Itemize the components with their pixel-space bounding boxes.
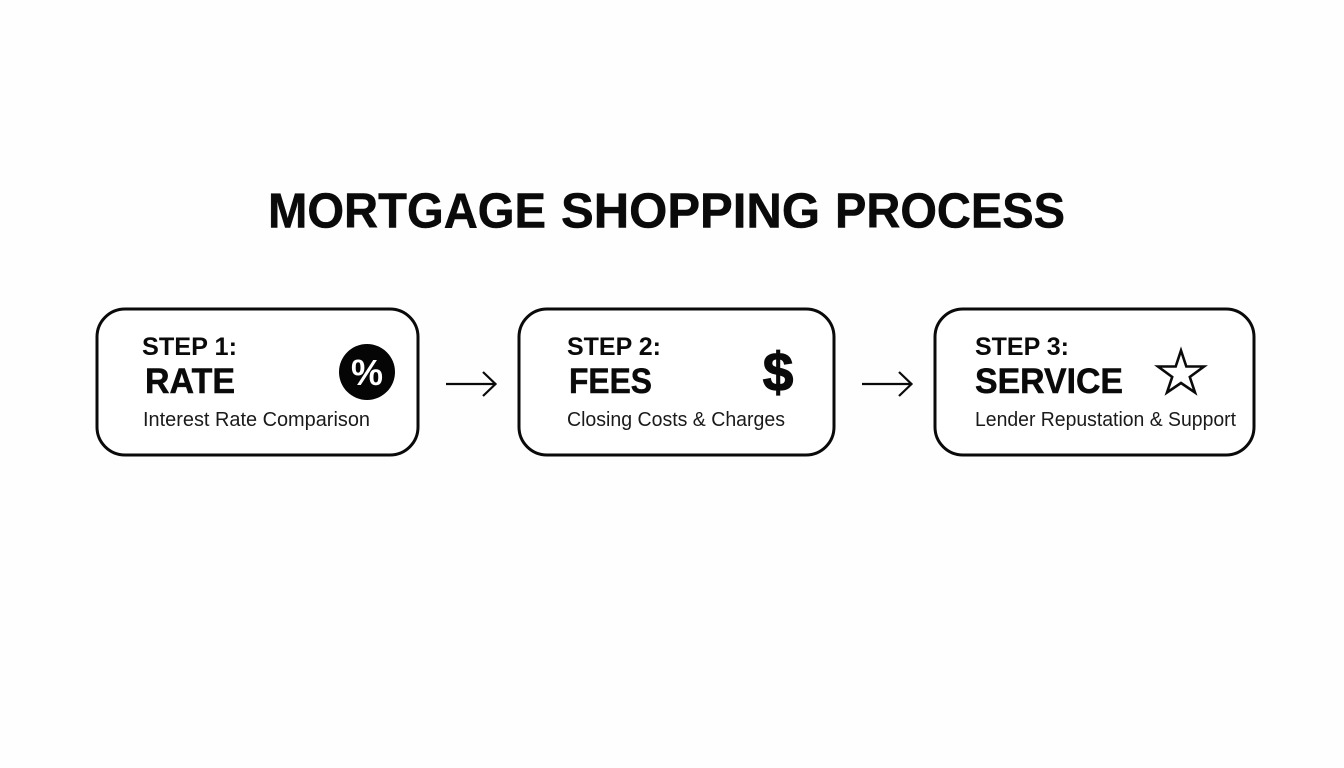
icon: dollar sign: $ — [763, 341, 793, 403]
icon: percent badge: % — [351, 352, 383, 393]
title: MORTGAGE — [268, 184, 546, 238]
step 1 heading: RATE — [145, 362, 235, 401]
title: PROCESS — [835, 184, 1065, 238]
arrow: step 1 to step 2 — [446, 372, 496, 396]
icon: percent badge — [339, 344, 395, 400]
step 3 heading: SERVICE — [975, 362, 1123, 401]
step 2 description: Closing Costs & Charges — [567, 409, 785, 431]
step 2 heading: FEES — [569, 362, 652, 401]
step 3 label: STEP 3: — [975, 333, 1069, 361]
step 1 description: Interest Rate Comparison — [143, 409, 370, 431]
panel: step 1 rate — [97, 309, 418, 455]
arrow: step 2 to step 3 — [862, 372, 912, 396]
step 1 label: STEP 1: — [142, 333, 237, 361]
title: SHOPPING — [561, 184, 820, 238]
step 2 label: STEP 2: — [567, 333, 661, 361]
panel: step 2 fees — [519, 309, 834, 455]
icon: star outline — [1158, 350, 1204, 392]
panel: step 3 service — [935, 309, 1254, 455]
title — [268, 184, 1065, 238]
step 3 description: Lender Repustation & Support — [975, 409, 1236, 431]
